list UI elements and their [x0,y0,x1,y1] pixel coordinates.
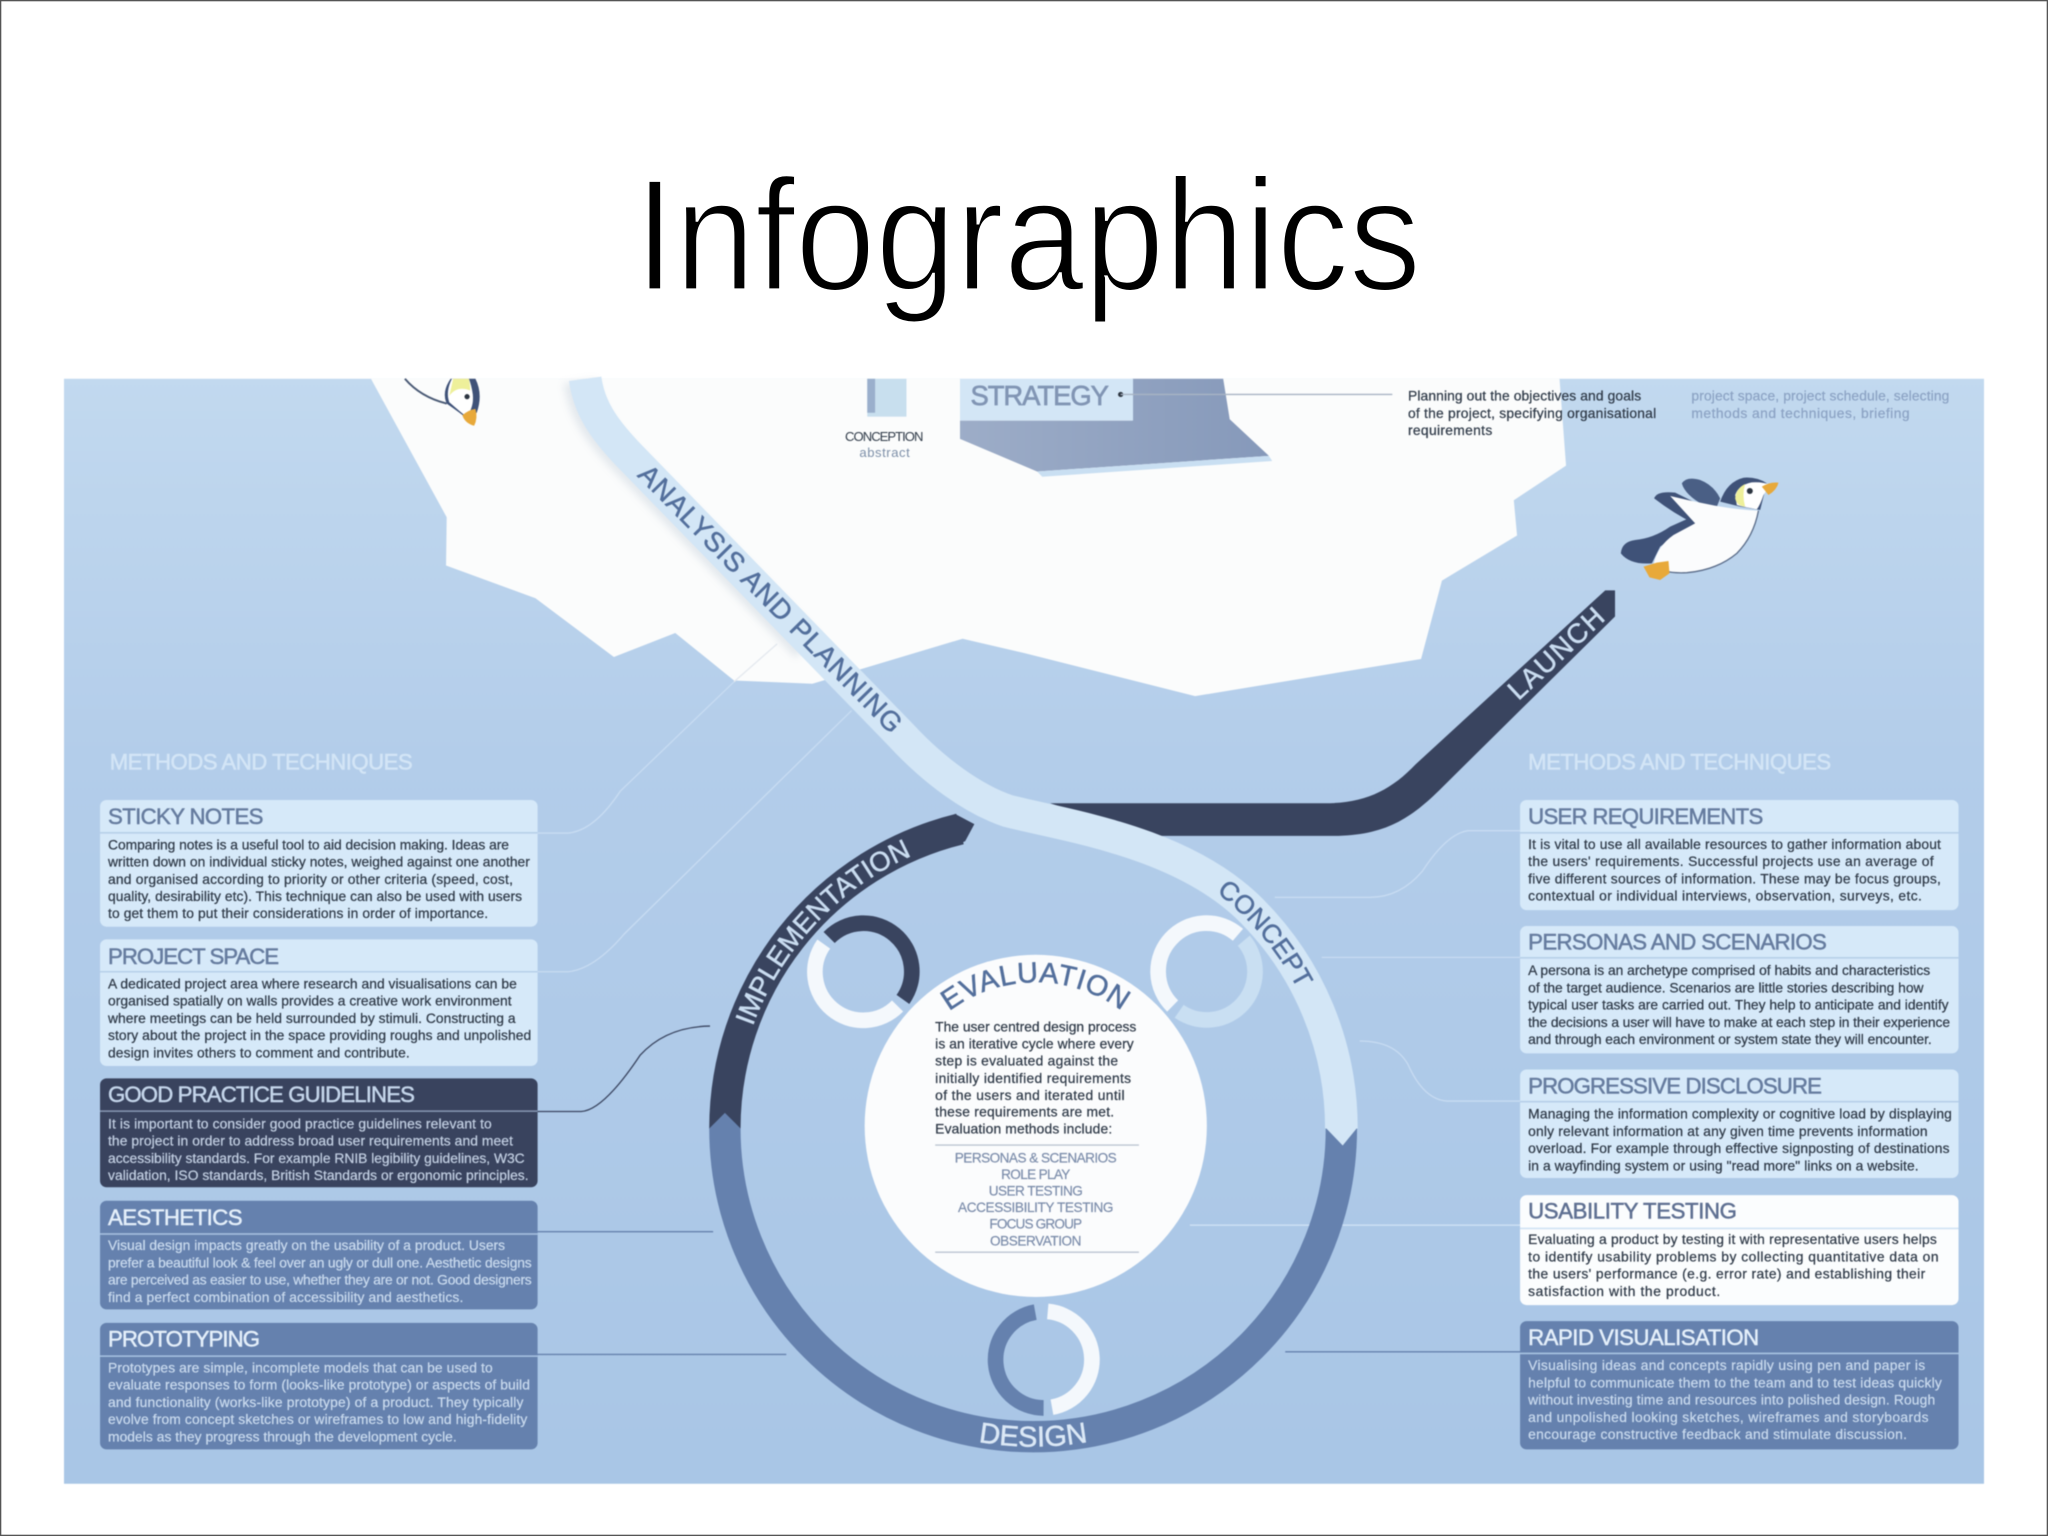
panel: personas and scenarios: and through each environment or system state they will encounter. [1528,1031,1932,1047]
panel: user requirements: USER REQUIREMENTS [1528,804,1763,829]
connector: prototyping [537,1353,786,1355]
right heading: methods and techniques: METHODS AND TECHNIQUES [1528,749,1831,774]
design ring segment [708,1128,1358,1453]
infographic background panel [64,379,1984,1484]
analysis and planning band with concept arc: ANALYSIS AND PLANNING [632,458,909,739]
connector: progressive disclosure [1360,1041,1520,1101]
panel: user requirements: five different sources of information. These may be focus groups, [1528,870,1941,886]
panel: good practice guidelines: validation, ISO standards, British Standards or ergonomic principles. [108,1167,529,1183]
panel: progressive disclosure: only relevant information at any given time prevents information [1528,1123,1928,1139]
connector: sticky notes [537,644,777,833]
evaluation methods list: ROLE PLAY [1001,1167,1070,1182]
evaluation description: Evaluation methods include: [935,1121,1112,1137]
implementation ring segment: IMPLEMENTATION [735,838,911,1025]
panel: project space: organised spatially on walls provides a creative work environment [108,993,512,1009]
panel: sticky notes: Comparing notes is a useful tool to aid decision making. Ideas are [108,836,509,852]
title: Infographics [635,146,1421,324]
panel: prototyping: evolve from concept sketches or wireframes to low and high-fidelity [108,1411,527,1427]
panel: project space: where meetings can be held surrounded by stimuli. Constructing a [107,1010,516,1026]
strategy description: of the project, specifying organisational [1408,405,1656,421]
panel: prototyping: evaluate responses to form (looks-like prototype) or aspects of build [108,1377,530,1393]
conception label: abstract [859,445,910,460]
strategy methods [1691,388,1949,421]
connector: aesthetics [537,1231,713,1233]
evaluation heading: EVALUATION [939,961,1132,1010]
panel: sticky notes: written down on individual sticky notes, weighed against one another [107,854,530,870]
panel: personas and scenarios [1520,926,1959,1053]
panel: progressive disclosure: in a wayfinding system or using "read more" links on a website. [1528,1157,1919,1173]
infographic [64,376,1984,1484]
evaluation methods list: FOCUS GROUP [989,1217,1082,1232]
connector: user requirements [1275,831,1520,897]
small cycle: implementation [815,923,912,1020]
evaluation description [935,1019,1136,1137]
implementation ring segment [708,813,975,1129]
panel: sticky notes [100,800,538,927]
panel: rapid visualisation: without investing time and resources into polished design. Rough [1527,1392,1935,1408]
panel: project space: PROJECT SPACE [108,944,279,969]
left heading: methods and techniques: METHODS AND TECHNIQUES [110,749,413,774]
panel: user requirements: contextual or individual interviews, observation, surveys, etc. [1528,888,1922,904]
panel: good practice guidelines: the project in order to address broad user requirements and meet [108,1133,513,1149]
panel: progressive disclosure: overload. For example through effective signposting of destinations [1528,1140,1950,1156]
strategy description: Planning out the objectives and goals [1408,388,1641,404]
panel: usability testing: Evaluating a product by testing it with representative users helps [1528,1231,1937,1247]
panel: prototyping: PROTOTYPING [108,1327,260,1352]
evaluation description: is an iterative cycle where every [935,1036,1134,1052]
panel: progressive disclosure: PROGRESSIVE DISCLOSURE [1528,1073,1822,1098]
panel: personas and scenarios: typical user tasks are carried out. They help to anticipate and identify [1528,997,1949,1013]
strategy block [960,379,1392,477]
analysis and planning band with concept arc [564,376,1358,1146]
analysis and planning band with concept arc: CONCEPT [1220,881,1314,984]
panel: good practice guidelines [100,1078,538,1187]
panel: aesthetics: are perceived as easier to use, whether they are or not. Good designers [108,1272,532,1288]
panel: good practice guidelines: accessibility standards. For example RNIB legibility guidelines, W3C [108,1150,525,1166]
evaluation description: The user centred design process [935,1019,1136,1035]
evaluation methods list: ACCESSIBILITY TESTING [958,1200,1113,1215]
panel: prototyping [100,1323,538,1449]
panel: rapid visualisation [1520,1321,1959,1449]
panel: aesthetics: Visual design impacts greatly on the usability of a product. Users [108,1237,505,1253]
panel: rapid visualisation: Visualising ideas and concepts rapidly using pen and paper is [1528,1357,1925,1373]
conception label [845,429,923,460]
panel: project space [100,939,538,1066]
strategy block: STRATEGY [970,380,1109,411]
launch band: LAUNCH [1501,601,1610,706]
panel: personas and scenarios: A persona is an archetype comprised of habits and characteristics [1528,962,1930,978]
evaluation methods list: USER TESTING [989,1183,1083,1198]
panel: personas and scenarios: the decisions a user will have to make at each step in their experience [1528,1014,1950,1030]
evaluation description: of the users and iterated until [935,1087,1125,1103]
strategy methods: project space, project schedule, selecting [1691,388,1949,404]
connector: rapid visualisation [1285,1351,1520,1353]
panel: aesthetics: find a perfect combination of accessibility and aesthetics. [108,1289,463,1305]
panel: sticky notes: to get them to put their considerations in order of importance. [108,905,488,921]
evaluation description: initially identified requirements [935,1070,1131,1086]
panel: rapid visualisation: and unpolished looking sketches, wireframes and storyboards [1528,1409,1929,1425]
conception pillar [867,379,906,417]
connector: project space [537,711,852,972]
panel: aesthetics [100,1201,538,1309]
panel: rapid visualisation: encourage constructive feedback and stimulate discussion. [1528,1426,1907,1442]
panel: aesthetics: AESTHETICS [108,1205,243,1230]
panel: project space: design invites others to comment and contribute. [108,1044,410,1060]
panel: usability testing [1520,1195,1959,1305]
panel: good practice guidelines: GOOD PRACTICE GUIDELINES [108,1082,415,1107]
panel: user requirements: It is vital to use all available resources to gather information about [1528,836,1941,852]
evaluation methods list: OBSERVATION [990,1233,1081,1248]
iceberg [371,379,1566,696]
strategy description [1408,388,1656,438]
evaluation description: these requirements are met. [935,1104,1114,1120]
launch band [1050,590,1615,836]
strategy methods: methods and techniques, briefing [1691,405,1910,421]
panel: sticky notes: and organised according to priority or other criteria (speed, cost, [108,871,513,887]
small cycle: concept [1158,923,1255,1020]
design ring segment: DESIGN [980,1422,1086,1448]
conception label: CONCEPTION [845,429,923,444]
panel: prototyping: and functionality (works-like prototype) of a product. They typically [108,1394,523,1410]
evaluation description: step is evaluated against the [935,1053,1118,1069]
panel: aesthetics: prefer a beautiful look & feel over an ugly or dull one. Aesthetic designs [108,1254,532,1270]
panel: project space: story about the project in the space providing roughs and unpolished [108,1027,531,1043]
penguin on iceberg [405,379,480,426]
panel: good practice guidelines: It is important to consider good practice guidelines relevant to [108,1115,492,1131]
flying penguin [1621,478,1778,580]
panel: rapid visualisation: helpful to communicate them to the team and to test ideas quickly [1528,1374,1942,1390]
panel: rapid visualisation: RAPID VISUALISATION [1528,1325,1759,1350]
connector: personas and scenarios [1322,956,1520,958]
strategy description: requirements [1408,422,1492,438]
panel: personas and scenarios: PERSONAS AND SCENARIOS [1528,929,1827,954]
evaluation circle [864,954,1208,1298]
evaluation methods list [955,1150,1117,1248]
panel: sticky notes: quality, desirability etc). This technique can also be used with users [108,888,522,904]
connector: good practice guidelines [537,1026,710,1112]
panel: user requirements: the users' requirements. Successful projects use an average of [1528,853,1934,869]
panel: personas and scenarios: of the target audience. Scenarios are little stories describing how [1528,979,1925,995]
panel: usability testing: to identify usability problems by collecting quantitative data on [1528,1248,1939,1264]
panel: sticky notes: STICKY NOTES [108,804,263,829]
panel: progressive disclosure [1520,1069,1959,1178]
panel: prototyping: Prototypes are simple, incomplete models that can be used to [108,1359,493,1375]
panel: usability testing: the users' performance (e.g. error rate) and establishing their [1528,1266,1926,1282]
connector: usability testing [1190,1224,1520,1226]
panel: prototyping: models as they progress through the development cycle. [108,1428,457,1444]
panel: progressive disclosure: Managing the information complexity or cognitive load by displaying [1528,1106,1952,1122]
panel: project space: A dedicated project area where research and visualisations can be [108,975,517,991]
evaluation methods list: PERSONAS & SCENARIOS [955,1150,1117,1165]
panel: usability testing: satisfaction with the product. [1528,1283,1720,1299]
small cycle: design [996,1311,1092,1408]
panel: usability testing: USABILITY TESTING [1528,1198,1737,1223]
panel: user requirements [1520,800,1959,910]
